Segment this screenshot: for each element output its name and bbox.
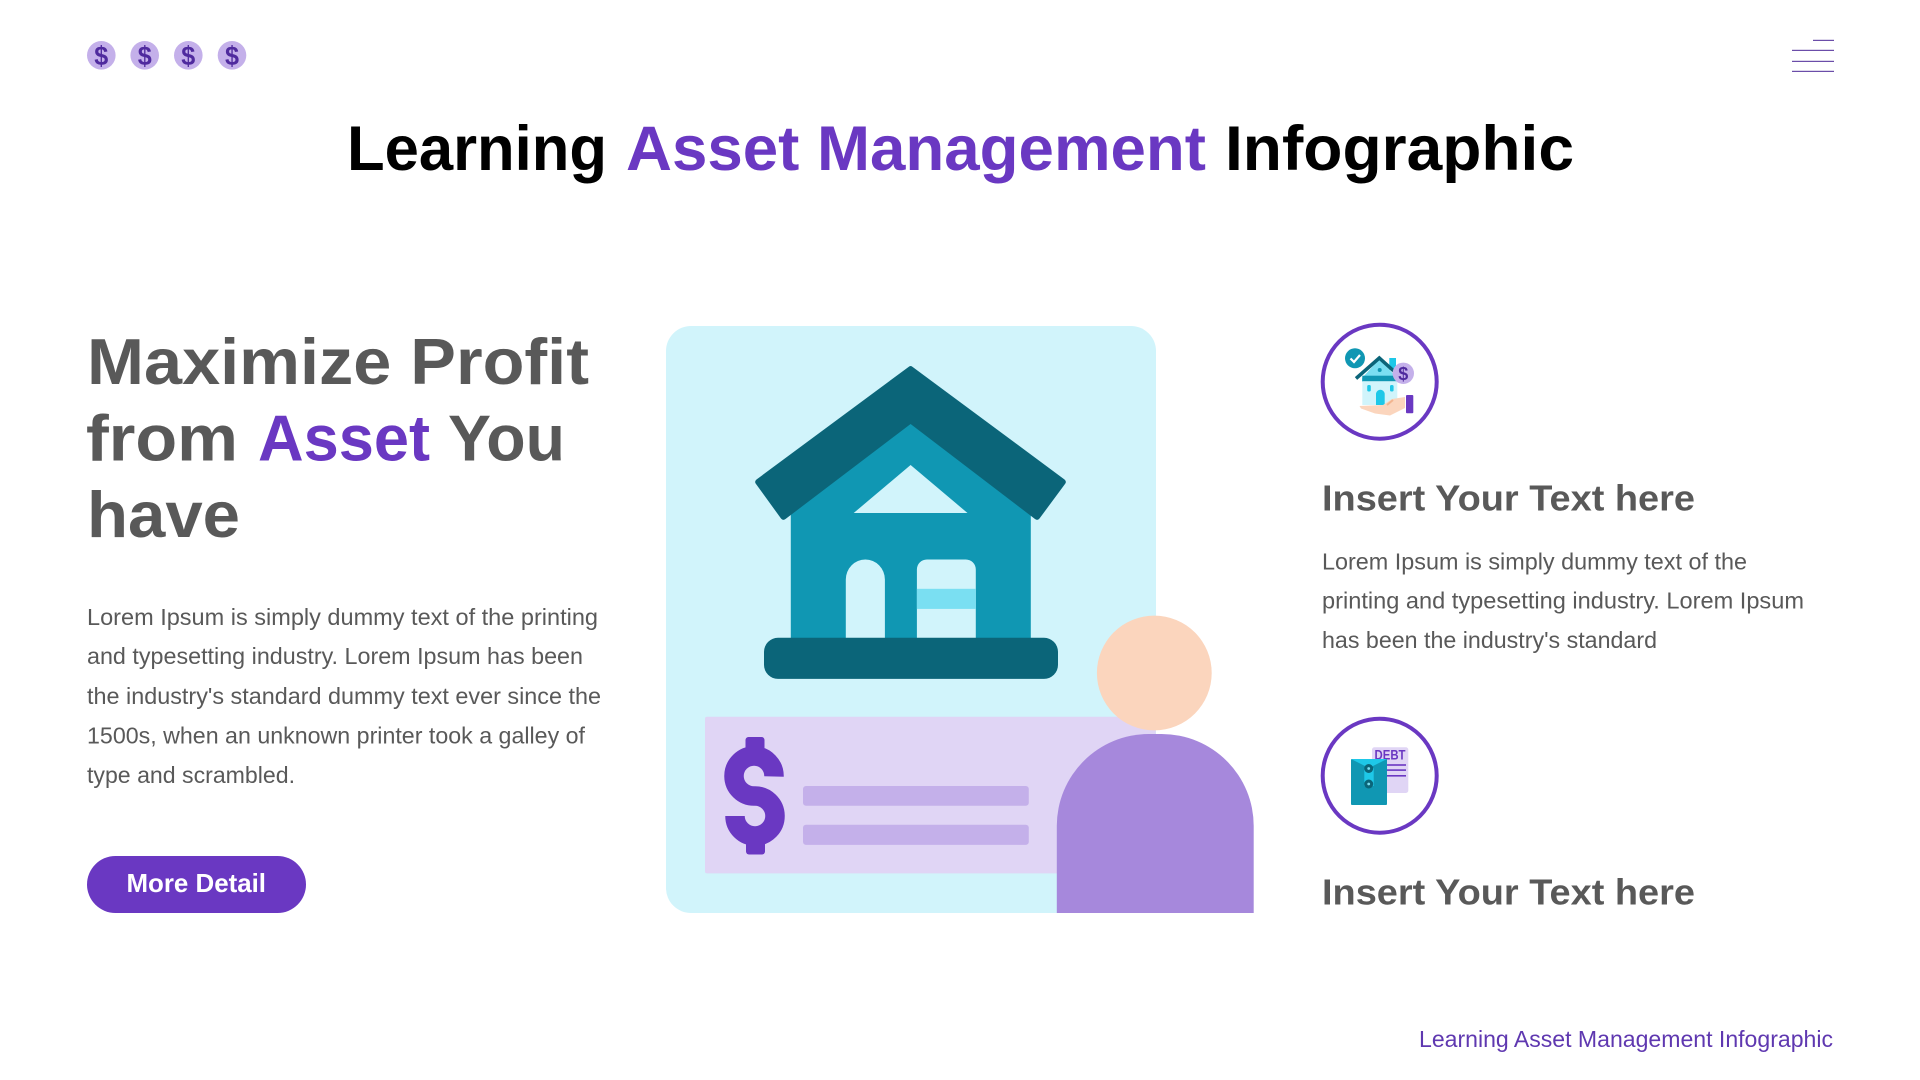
heading: insert your text 2: Insert Your Text here (1322, 872, 1695, 912)
panel: cheque (705, 717, 1156, 873)
text block: intro paragraph: type and scrambled. (87, 762, 295, 788)
heading: maximize profit: You (448, 402, 565, 474)
footer label: Learning Asset Management Infographic (1419, 1026, 1833, 1052)
icon: menu lines (1792, 40, 1834, 72)
icon: coin 3 (174, 41, 203, 71)
icon: coin 3: $ (181, 41, 195, 71)
heading: insert your text 1: Insert Your Text here (1322, 478, 1695, 518)
icon: coin 1: $ (94, 41, 108, 71)
text block: intro paragraph: Lorem Ipsum is simply dummy text of the printing (87, 604, 598, 630)
icon: house in hand badge: $ (1398, 364, 1408, 384)
person: head (1097, 616, 1212, 730)
icon: coin 2 (130, 41, 159, 71)
text block: intro paragraph: the industry's standard dummy text ever since the (87, 683, 601, 709)
button: more detail (87, 856, 306, 913)
icon: house in hand badge (1323, 325, 1437, 439)
text block: intro paragraph (87, 604, 601, 788)
button: more detail: More Detail (126, 868, 266, 898)
title: Asset Management (626, 114, 1206, 184)
icon: coin 4: $ (225, 41, 239, 71)
text block: right paragraph: printing and typesetting industry. Lorem Ipsum (1322, 588, 1804, 614)
title (347, 114, 1574, 184)
text block: right paragraph (1322, 548, 1804, 653)
title: Learning (347, 114, 607, 184)
heading: maximize profit (86, 325, 589, 551)
heading: maximize profit: Maximize Profit (87, 325, 589, 398)
icon: debt folder badge (1323, 719, 1437, 833)
text block: intro paragraph: and typesetting industry. Lorem Ipsum has been (87, 643, 583, 669)
icon: coin 4 (218, 41, 246, 71)
heading: maximize profit: have (87, 478, 240, 551)
text block: right paragraph: has been the industry's standard (1322, 627, 1657, 653)
icon: coin 1 (87, 41, 116, 71)
illustration: house, cheque and person (666, 326, 1254, 913)
cheque text lines (803, 786, 1029, 845)
heading: maximize profit: from (86, 402, 238, 474)
icon: dollar sign (734, 737, 775, 854)
icon: coin 2: $ (138, 41, 152, 71)
text block: right paragraph: Lorem Ipsum is simply dummy text of the (1322, 548, 1747, 574)
icon: debt folder badge: DEBT (1374, 748, 1406, 762)
icon row: four dollar coins (87, 41, 246, 71)
heading: maximize profit: Asset (258, 402, 430, 474)
text block: intro paragraph: 1500s, when an unknown printer took a galley of (87, 722, 586, 748)
icon: house (755, 366, 1066, 679)
person: body (1057, 734, 1254, 913)
panel: light blue background (666, 326, 1156, 913)
title: Infographic (1225, 114, 1574, 184)
